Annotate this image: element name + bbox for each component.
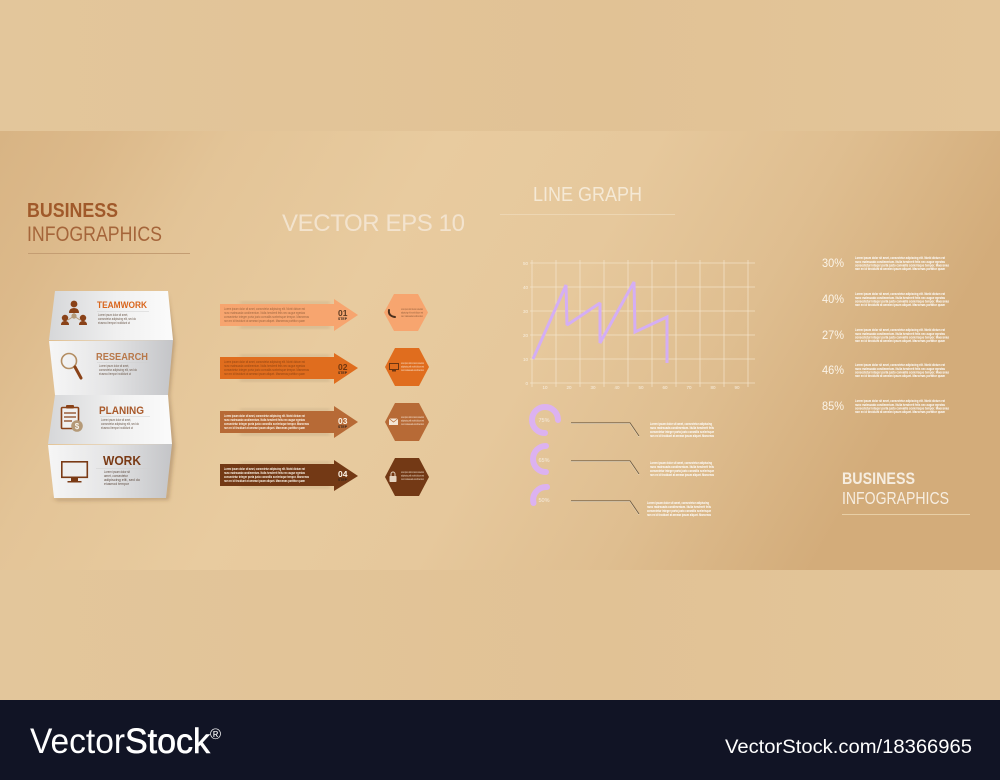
arrow 04: non ex id tincidunt at aenean ipsum aliquet. Maecenas porttitor quam [224,479,305,483]
arrow 04: nunc malesuada condimentum. Nulla hendrerit felis nec augue egestas [224,471,305,475]
arrow 01: non ex id tincidunt at aenean ipsum aliquet. Maecenas porttitor quam [224,319,305,323]
hexagon: lock: Lorem ipsum dolor sit amet consectetur [401,470,424,474]
donut: 65%: 65% [538,458,550,464]
fold: teamwork: eiusmod tempor incididunt ut [98,321,130,325]
line chart: 20 [566,385,572,390]
heading: line graph: LINE GRAPH [533,184,642,206]
footer bar [0,700,1000,780]
fold: work: adipiscing elit, sed do [104,478,140,482]
panel: hexagons [384,294,429,496]
arrow 01: 01 [338,308,348,318]
donut callouts [532,407,714,517]
fold: planing: consectetur adipiscing elit, sed do [101,422,139,426]
heading: business infographics left [27,200,190,254]
hexagon: mail [385,403,429,441]
fold: planing: $ [75,422,80,431]
row 85%: non ex id tincidunt at aenean ipsum aliquet. Maecenas porttitor quam [855,410,945,414]
fold: teamwork: TEAMWORK [97,300,147,311]
row 40%: nunc malesuada condimentum. Nulla hendrerit felis nec augue egestas [855,296,945,300]
fold: work: amet, consectetur [104,474,129,478]
hexagon: lock [385,458,429,496]
arrow 03: Lorem ipsum dolor sit amet, consectetur adipiscing elit. Morbi dictum est [224,414,306,418]
percentage list [822,256,949,414]
arrow 02: Lorem ipsum dolor sit amet, consectetur adipiscing elit. Morbi dictum est [224,360,305,364]
line chart [523,260,755,390]
fold: research: Lorem ipsum dolor sit amet, [99,364,129,368]
hexagon: mail: Lorem ipsum dolor sit amet consectetur [401,415,424,419]
row 30% [822,256,949,271]
fold: work: WORK [103,453,142,468]
line chart: 30 [523,309,528,314]
fold: planing [48,395,172,444]
hexagon: phone [384,294,428,331]
row 85%: Lorem ipsum dolor sit amet, consectetur adipiscing elit. Morbi dictum est [855,399,946,403]
data line [533,282,667,363]
hexagon: monitor: adipiscing elit morbi dictum est [401,364,424,368]
arrow 04: 04 [338,469,348,479]
donut: 75%: 75% [538,418,550,424]
row 85% [822,399,949,414]
row 27%: 27% [822,328,844,342]
row 30%: Lorem ipsum dolor sit amet, consectetur adipiscing elit. Morbi dictum est [855,256,946,260]
heading: business infographics right: INFOGRAPHICS [842,488,949,508]
heading: business infographics left: BUSINESS [27,200,118,222]
fold: planing: PLANING [99,405,144,417]
arrow 02 [220,353,358,384]
hexagon: mail: nunc malesuada condimentum [401,422,424,426]
bottom background band [0,570,1000,700]
line chart: 80 [710,385,716,390]
top background band [0,0,1000,131]
heading: business infographics right: BUSINESS [842,469,915,488]
row 40%: non ex id tincidunt at aenean ipsum aliquet. Maecenas porttitor quam [855,303,945,307]
footer logo [30,722,221,761]
donut: 50%: consectetur integer porta justo convallis scelerisque [647,509,711,513]
donut: 75%: non ex id tincidunt at aenean ipsum aliquet. Maecenas [650,434,714,438]
donut: 65%: Lorem ipsum dolor sit amet, consectetur adipiscing [650,461,712,465]
row 27%: nunc malesuada condimentum. Nulla hendrerit felis nec augue egestas [855,332,945,336]
heading: business infographics left: INFOGRAPHICS [27,223,162,246]
donut: 65%: non ex id tincidunt at aenean ipsum aliquet. Maecenas [650,473,714,477]
row 27%: Lorem ipsum dolor sit amet, consectetur adipiscing elit. Morbi dictum est [855,328,946,332]
fold: research: consectetur adipiscing elit, sed do [99,368,137,372]
fold: teamwork: consectetur adipiscing elit, sed do [98,317,136,321]
arrow 03: 03 [338,416,348,426]
line chart: 40 [614,385,620,390]
donut: 65%: nunc malesuada condimentum. Nulla hendrerit felis [650,465,714,469]
arrow 03: consectetur integer porta justo convallis scelerisque tempor. Maecenas [224,422,309,426]
arrow 01: Lorem ipsum dolor sit amet, consectetur adipiscing elit. Morbi dictum est [224,307,305,311]
heading: business infographics right [842,469,970,515]
arrow 04: STEP [338,478,348,482]
donut: 50%: 50% [538,498,550,504]
row 30%: 30% [822,256,844,270]
hexagon: phone: adipiscing elit morbi dictum est [401,310,423,314]
arrow 03: nunc malesuada condimentum. Nulla hendrerit felis nec augue egestas [224,418,305,422]
arrow 01: STEP [338,317,348,321]
row 46%: consectetur integer porta justo convallis scelerisque tempor. Maecenas [855,370,949,374]
fold: teamwork [49,291,173,340]
footer logo: ® [210,726,221,743]
hexagon: lock: adipiscing elit morbi dictum est [401,474,424,478]
panel: folded paper steps [48,291,175,501]
fold: research: eiusmod tempor incididunt ut [99,372,131,376]
arrow 03: non ex id tincidunt at aenean ipsum aliquet. Maecenas porttitor quam [224,426,305,430]
fold: planing: eiusmod tempor incididunt ut [101,426,133,430]
donut: 65% [533,446,714,477]
arrow 01: consectetur integer porta justo convallis scelerisque tempor. Maecenas [224,315,309,319]
row 46%: nunc malesuada condimentum. Nulla hendrerit felis nec augue egestas [855,367,945,371]
footer logo: Stock [125,722,210,761]
donut: 75% [532,407,714,438]
fold: work: eiusmod tempor [104,482,130,486]
hexagon: phone: nunc malesuada condimentum [401,314,423,318]
donut: 50% [533,487,711,517]
arrow 02: non ex id tincidunt at aenean ipsum aliquet. Maecenas porttitor quam [224,372,305,376]
hexagon: monitor: nunc malesuada condimentum [401,368,424,372]
arrow 01 [220,299,358,331]
row 27%: non ex id tincidunt at aenean ipsum aliquet. Maecenas porttitor quam [855,339,945,343]
heading: vector eps 10: VECTOR EPS 10 [282,210,465,237]
panel: step arrows [220,299,358,491]
row 30%: consectetur integer porta justo convallis scelerisque tempor. Maecenas [855,264,949,268]
footer logo: Vector [30,722,125,761]
row 46%: Lorem ipsum dolor sit amet, consectetur adipiscing elit. Morbi dictum est [855,363,946,367]
hexagon: lock: nunc malesuada condimentum [401,477,424,481]
line chart: 50 [638,385,644,390]
line chart: 10 [523,357,528,362]
line chart: 60 [662,385,668,390]
line chart: 30 [590,385,596,390]
line chart: 40 [523,285,528,290]
row 40%: 40% [822,292,844,306]
line chart: 50 [523,261,528,266]
donut: 50%: non ex id tincidunt at aenean ipsum aliquet. Maecenas [647,513,711,517]
row 30%: nunc malesuada condimentum. Nulla hendrerit felis nec augue egestas [855,260,945,264]
fold: research: RESEARCH [96,351,148,363]
arrow 02: consectetur integer porta justo convallis scelerisque tempor. Maecenas [224,368,309,372]
donut: 75%: consectetur integer porta justo convallis scelerisque [650,430,714,434]
hexagon: monitor [385,348,429,386]
row 40%: Lorem ipsum dolor sit amet, consectetur adipiscing elit. Morbi dictum est [855,292,946,296]
arrow 02: STEP [338,371,348,375]
line chart: 90 [734,385,740,390]
hexagon: phone: Lorem ipsum dolor sit amet consectetur [401,307,423,311]
fold: work [48,444,172,498]
hexagon: monitor: Lorem ipsum dolor sit amet consectetur [401,361,424,365]
row 40% [822,292,949,307]
arrow 04 [220,460,358,491]
fold: planing: Lorem ipsum dolor sit amet, [101,418,131,422]
line chart: 0 [525,381,528,386]
paper shadow [52,293,175,501]
donut: 50%: Lorem ipsum dolor sit amet, consectetur adipiscing [647,501,709,505]
row 30%: non ex id tincidunt at aenean ipsum aliquet. Maecenas porttitor quam [855,267,945,271]
row 46%: non ex id tincidunt at aenean ipsum aliquet. Maecenas porttitor quam [855,374,945,378]
fold: teamwork: Lorem ipsum dolor sit amet, [98,313,128,317]
row 46%: 46% [822,363,844,377]
donut: 75%: nunc malesuada condimentum. Nulla hendrerit felis [650,426,714,430]
row 85%: nunc malesuada condimentum. Nulla hendrerit felis nec augue egestas [855,403,945,407]
main panel background [0,131,1000,570]
arrow 02: nunc malesuada condimentum. Nulla hendrerit felis nec augue egestas [224,364,305,368]
row 85%: consectetur integer porta justo convallis scelerisque tempor. Maecenas [855,406,949,410]
row 85%: 85% [822,399,844,413]
line chart: 70 [686,385,692,390]
row 27% [822,328,949,343]
arrow 02: 02 [338,362,348,372]
footer image id: VectorStock.com/18366965 [725,736,972,758]
arrow 04: Lorem ipsum dolor sit amet, consectetur adipiscing elit. Morbi dictum est [224,467,306,471]
arrow 01: nunc malesuada condimentum. Nulla hendrerit felis nec augue egestas [224,311,305,315]
donut: 50%: nunc malesuada condimentum. Nulla hendrerit felis [647,505,711,509]
fold: research [49,340,173,395]
fold: work: Lorem ipsum dolor sit [104,470,131,474]
donut: 75%: Lorem ipsum dolor sit amet, consectetur adipiscing [650,422,712,426]
line chart: 10 [542,385,548,390]
row 27%: consectetur integer porta justo convallis scelerisque tempor. Maecenas [855,336,949,340]
row 40%: consectetur integer porta justo convallis scelerisque tempor. Maecenas [855,300,949,304]
row 46% [822,363,949,378]
arrow 04: consectetur integer porta justo convallis scelerisque tempor. Maecenas [224,475,309,479]
hexagon: mail: adipiscing elit morbi dictum est [401,418,424,422]
donut: 65%: consectetur integer porta justo convallis scelerisque [650,469,714,473]
arrow 03: STEP [338,425,348,429]
line chart: 20 [523,333,528,338]
arrow 03 [220,406,358,438]
